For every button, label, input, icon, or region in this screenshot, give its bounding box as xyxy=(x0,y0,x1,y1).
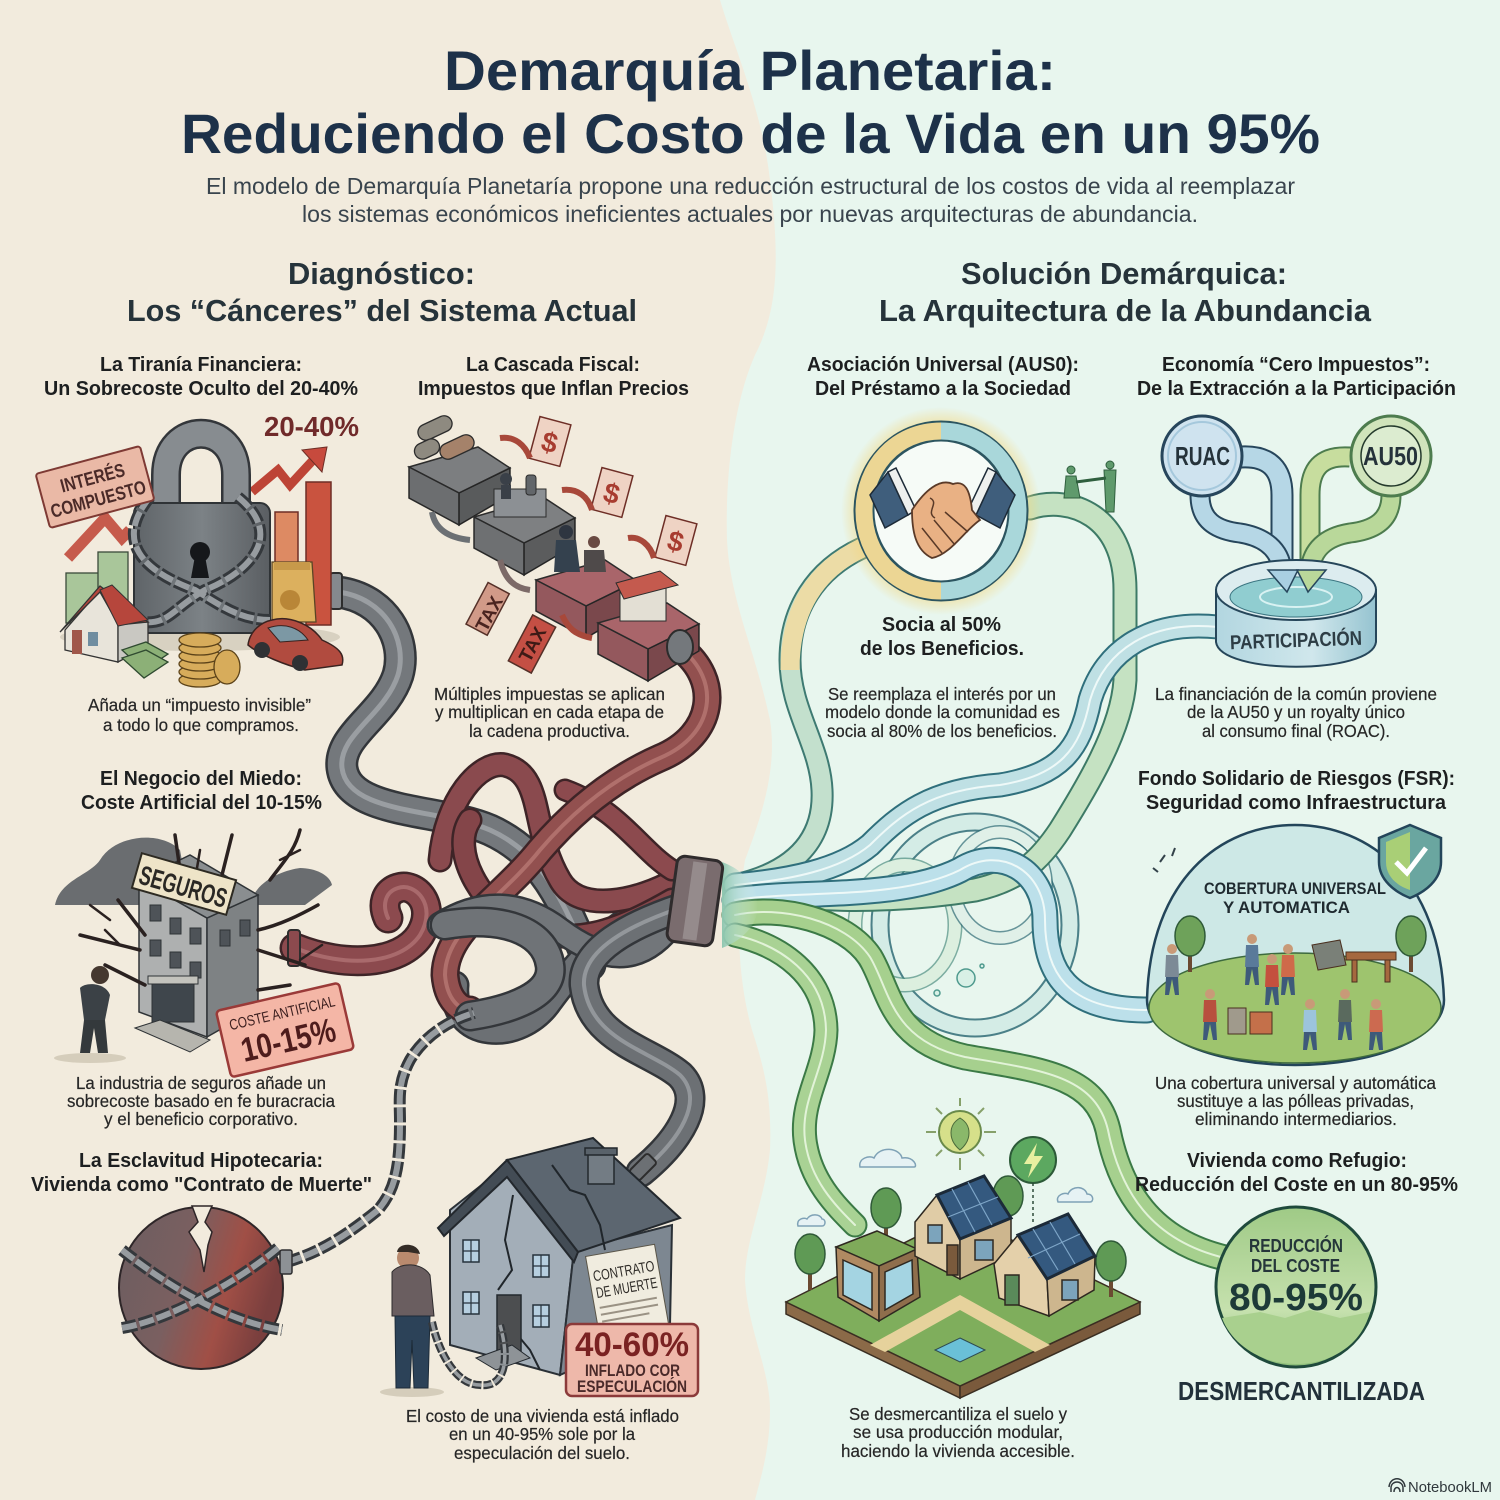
glow xyxy=(841,407,1041,615)
text: socia al 50%: de los Beneficios. xyxy=(860,638,1024,660)
label: cobertura: COBERTURA UNIVERSAL xyxy=(1204,879,1386,898)
subheading: fondo solidario: Fondo Solidario de Riesgos (FSR): xyxy=(1138,768,1455,790)
label: desmercantilizada: DESMERCANTILIZADA xyxy=(1178,1376,1425,1406)
icon: clouds xyxy=(798,1149,1093,1226)
subheading: tirania financiera: Un Sobrecoste Oculto del 20-40% xyxy=(44,378,358,400)
pipe: to reduction circle green xyxy=(735,912,1225,1258)
text: financiacion comun xyxy=(1155,684,1437,741)
circle: ruac: RUAC xyxy=(1175,441,1230,471)
icon: dollar tags: $ xyxy=(538,425,562,460)
pipe: gray financial xyxy=(338,592,590,965)
sign: seguros xyxy=(132,853,236,915)
text: industria de seguros: sobrecoste basado en fe buracracia xyxy=(67,1091,335,1111)
trees xyxy=(795,1176,1126,1297)
text: socia al 50% xyxy=(860,614,1024,660)
text: multiples impuestos xyxy=(434,684,665,741)
text: financiacion comun: La financiación de la común proviene xyxy=(1155,684,1437,704)
illustration: participation tank xyxy=(1162,416,1431,667)
contract paper: CONTRATO xyxy=(592,1258,656,1285)
label: interes compuesto xyxy=(36,446,154,528)
sign: seguros: SEGUROS xyxy=(136,860,231,914)
chains on ball xyxy=(122,1248,282,1330)
subheading: fondo solidario xyxy=(1138,768,1455,814)
icon: shield xyxy=(1379,825,1441,898)
badge: coste artificial: COSTE ANTIFICIAL xyxy=(228,993,337,1034)
icon: red car xyxy=(248,619,343,671)
text: reemplaza interes xyxy=(825,684,1060,741)
text: impuesto invisible: a todo lo que compramos. xyxy=(103,715,299,735)
trees xyxy=(1175,916,1426,972)
illustration: cracked house xyxy=(380,1138,698,1397)
pipe: maroon top loop xyxy=(440,765,675,901)
text: costo vivienda: especulación del suelo. xyxy=(454,1443,630,1463)
illustration: tax cascade xyxy=(409,413,699,681)
badge: 40-60%: INFLADO COR xyxy=(585,1361,680,1380)
ball connector xyxy=(280,1250,292,1274)
chain: man to house xyxy=(432,1322,505,1385)
subheading: esclavitud hipotecaria xyxy=(31,1150,372,1196)
pipe: maroon middle xyxy=(464,820,672,936)
ground xyxy=(1149,953,1441,1063)
text: reduccion: DEL COSTE xyxy=(1251,1256,1340,1276)
text: cobertura universal: eliminando intermediarios. xyxy=(1195,1109,1397,1129)
text: multiples impuestos: y multiplican en cada etapa de xyxy=(435,702,664,722)
cracks xyxy=(498,1165,605,1370)
icon: dollar tags: $ xyxy=(664,524,688,559)
icon: coffee bag xyxy=(272,562,316,622)
text: costo vivienda: en un 40-95% sole por la xyxy=(449,1424,635,1444)
people xyxy=(1165,934,1383,1050)
pipe: ruac right xyxy=(1240,457,1282,570)
contract paper: DE MUERTE xyxy=(595,1275,659,1302)
text: industria de seguros: La industria de seguros añade un xyxy=(76,1073,326,1093)
ring xyxy=(864,431,1018,591)
bars xyxy=(275,482,331,625)
crack xyxy=(189,1206,212,1272)
subtitle xyxy=(206,173,1295,227)
subheading: tirania financiera xyxy=(44,354,358,400)
icon: dollar tags: $ xyxy=(600,476,624,511)
subheading: vivienda refugio: Reducción del Coste en un 80-95% xyxy=(1135,1174,1458,1196)
circle: ruac xyxy=(1162,416,1242,496)
pipe: gray to house xyxy=(584,908,690,1172)
label: 20-40%: 20-40% xyxy=(264,411,359,442)
text: financiacion comun: al consumo final (ROAC). xyxy=(1202,721,1390,741)
badge: 40-60% xyxy=(566,1324,698,1396)
stroller and cart xyxy=(1228,1008,1272,1034)
text: multiples impuestos: Múltiples impuestas se aplican xyxy=(434,684,665,704)
pipe: ruac down xyxy=(1200,495,1282,570)
icon: sun leaf xyxy=(926,1098,996,1170)
pipe: gray to chain xyxy=(445,922,550,1016)
text: cobertura universal xyxy=(1155,1073,1436,1129)
pipe: from handshake, green xyxy=(735,504,1125,899)
text: financiacion comun: de la AU50 y un royalty único xyxy=(1187,702,1405,722)
text: impuesto invisible: Añada un “impuesto invisible” xyxy=(88,695,311,715)
heading: solucion: Solución Demárquica: xyxy=(961,256,1287,291)
box: store xyxy=(598,571,699,681)
pipe: to handshake xyxy=(735,548,862,885)
box: raw materials xyxy=(409,413,510,525)
pipe: to dome blue xyxy=(735,860,1147,1010)
box: factory xyxy=(474,473,575,575)
padlock xyxy=(60,434,340,651)
subheading: esclavitud hipotecaria: Vivienda como "Contrato de Muerte" xyxy=(31,1174,372,1196)
icon: dollar tags xyxy=(529,417,697,565)
label: interes compuesto: COMPUESTO xyxy=(48,477,149,523)
subheading: cascada fiscal xyxy=(418,354,689,400)
picnic table xyxy=(1312,940,1396,982)
text: industria de seguros xyxy=(67,1073,335,1129)
subheading: cascada fiscal: Impuestos que Inflan Precios xyxy=(418,378,689,400)
chain to pipe xyxy=(287,1013,474,1262)
heading: diagnostico: Los “Cánceres” del Sistema Actual xyxy=(127,293,637,328)
icon: sparkle lines xyxy=(1153,848,1175,872)
modular cube house xyxy=(836,1231,920,1321)
subheading: negocio del miedo xyxy=(81,768,322,814)
icon: banknotes xyxy=(122,642,168,678)
icon: tax tags: TAX xyxy=(515,623,551,666)
pipe: maroon insurance xyxy=(295,887,427,961)
title: Demarquía Planetaria: xyxy=(444,39,1056,102)
platform xyxy=(786,1215,1140,1398)
house two xyxy=(994,1214,1095,1316)
text: costo vivienda xyxy=(406,1406,679,1463)
icon: energy bolt xyxy=(1010,1137,1056,1225)
tank body xyxy=(1216,590,1376,667)
subheading: asociacion universal: Del Préstamo a la Sociedad xyxy=(815,378,1071,400)
text: socia al 50%: Socia al 50% xyxy=(882,614,1001,636)
icon: small house xyxy=(60,585,148,662)
icon: coins xyxy=(179,633,240,687)
text: cobertura universal: sustituye a las pólleas privadas, xyxy=(1177,1091,1414,1111)
figure: chained man xyxy=(380,1245,444,1397)
text: costo vivienda: El costo de una vivienda está inflado xyxy=(406,1406,679,1426)
icon: tax tags xyxy=(466,583,556,673)
contract paper xyxy=(586,1244,669,1337)
illustration: handshake circle xyxy=(841,407,1116,615)
heading: solucion xyxy=(879,256,1372,328)
label: cobertura xyxy=(1204,879,1386,917)
building xyxy=(139,855,258,1037)
pipe socket xyxy=(667,630,693,664)
circle: au50: AU50 xyxy=(1363,441,1418,471)
text: desmercantiliza: Se desmercantiliza el suelo y xyxy=(849,1404,1067,1424)
illustration: padlock, debt and goods xyxy=(36,411,359,687)
arrowheads xyxy=(1268,570,1326,592)
subheading: fondo solidario: Seguridad como Infraestructura xyxy=(1146,792,1447,814)
subheading: asociacion universal: Asociación Universal (AUS0): xyxy=(807,354,1079,376)
title: Reduciendo el Costo de la Vida en un 95% xyxy=(181,102,1320,165)
thorns xyxy=(80,830,322,990)
heading: diagnostico: Diagnóstico: xyxy=(288,256,475,291)
background: cream left side xyxy=(0,0,776,1500)
subheading: tirania financiera: La Tiranía Financiera: xyxy=(100,354,302,376)
pipe: au50 down xyxy=(1310,495,1391,570)
windows xyxy=(150,905,250,978)
sleeves xyxy=(870,468,1015,528)
finger lines xyxy=(922,498,968,553)
figures on pipe xyxy=(1064,461,1116,512)
illustration: reduction circle xyxy=(1216,1207,1376,1367)
pipe: participation blue xyxy=(735,626,1218,885)
pipe: gray middle xyxy=(440,907,675,955)
text: desmercantiliza xyxy=(841,1404,1075,1461)
text: reduccion: 80-95% xyxy=(1229,1277,1363,1319)
icon: tax tags: TAX xyxy=(472,593,508,635)
subtitle: El modelo de Demarquía Planetaría propone una reducción estructural de los costos de vida al reemplazar xyxy=(206,173,1295,199)
arrow: rising right xyxy=(252,447,327,492)
text: desmercantiliza: se usa producción modular, xyxy=(853,1422,1063,1442)
roof xyxy=(438,1138,680,1262)
pipe: maroon upper short xyxy=(565,790,672,870)
pipe: maroon fiscal xyxy=(445,648,707,1010)
text: reemplaza interes: socia al 80% de los beneficios. xyxy=(827,721,1057,741)
icon: water bubbles xyxy=(934,964,984,996)
badge: 40-60%: ESPECULACIÓN xyxy=(577,1377,687,1396)
badge: coste artificial xyxy=(216,983,354,1077)
entrance xyxy=(135,976,210,1052)
pipe: gray lower loop xyxy=(455,895,680,1030)
label: cobertura: Y AUTOMATICA xyxy=(1223,898,1350,917)
text: reduccion xyxy=(1229,1235,1363,1319)
inner hills xyxy=(1222,1310,1370,1364)
tangled pipes: cancers of the current system xyxy=(288,573,707,1181)
illustration: sustainable housing xyxy=(786,1098,1140,1398)
pipe sockets xyxy=(288,573,657,1181)
subheading: cero impuestos: De la Extracción a la Participación xyxy=(1137,378,1456,400)
circle: au50 xyxy=(1351,416,1431,496)
subtitle: los sistemas económicos ineficientes actuales por nuevas arquitecturas de abundancia. xyxy=(302,201,1198,227)
badge: coste artificial: 10-15% xyxy=(237,1011,339,1070)
arrow: rising left xyxy=(68,518,130,558)
subheading: negocio del miedo: Coste Artificial del 10-15% xyxy=(81,792,322,814)
pond xyxy=(935,1338,985,1362)
subheading: vivienda refugio xyxy=(1135,1150,1458,1196)
text: reemplaza interes: Se reemplaza el interés por un xyxy=(828,684,1056,704)
box: intermediaries xyxy=(536,525,637,638)
path cross xyxy=(870,1295,1050,1352)
tank water xyxy=(1216,560,1376,620)
label: interes compuesto: INTERÉS xyxy=(58,459,127,497)
subheading: esclavitud hipotecaria: La Esclavitud Hipotecaria: xyxy=(79,1150,323,1172)
heading: solucion: La Arquitectura de la Abundancia xyxy=(879,293,1372,328)
hands xyxy=(912,482,980,558)
text: reduccion: REDUCCIÓN xyxy=(1249,1235,1343,1256)
glass rings xyxy=(855,822,1070,1028)
chimney xyxy=(585,1148,617,1184)
illustration: wrecking ball and chain xyxy=(119,1013,474,1369)
collar joining the pipes xyxy=(666,855,758,948)
subheading: cero impuestos xyxy=(1137,354,1456,400)
logo: notebooklm: NotebookLM xyxy=(1408,1480,1492,1496)
text: impuesto invisible xyxy=(88,695,311,735)
illustration: glass dome community xyxy=(1147,825,1444,1065)
house walls xyxy=(450,1165,672,1375)
windows and door xyxy=(463,1240,549,1370)
icon: green boxes xyxy=(66,552,128,623)
pipe: to housing green xyxy=(735,935,855,1225)
chain around lock xyxy=(134,497,270,622)
text: multiples impuestos: la cadena productiva. xyxy=(469,721,630,741)
subheading: cascada fiscal: La Cascada Fiscal: xyxy=(466,354,640,376)
house one xyxy=(915,1176,1011,1279)
subheading: asociacion universal xyxy=(807,354,1079,400)
text: reemplaza interes: modelo donde la comunidad es xyxy=(825,702,1060,722)
label: participacion: PARTICIPACIÓN xyxy=(1230,626,1362,654)
illustration: insurance building xyxy=(54,830,354,1077)
text: industria de seguros: y el beneficio corporativo. xyxy=(104,1109,298,1129)
subheading: vivienda refugio: Vivienda como Refugio: xyxy=(1187,1150,1407,1172)
subheading: negocio del miedo: El Negocio del Miedo: xyxy=(100,768,302,790)
figure: worried man xyxy=(54,966,126,1063)
pipe: au50 left xyxy=(1310,457,1350,570)
subheading: cero impuestos: Economía “Cero Impuestos”: xyxy=(1162,354,1430,376)
heading: diagnostico xyxy=(127,256,637,328)
clean pipes: architecture of abundance xyxy=(735,504,1225,1258)
arrows: cascade red xyxy=(432,438,654,638)
circle xyxy=(1216,1207,1376,1367)
title xyxy=(181,39,1320,165)
text: cobertura universal: Una cobertura universal y automática xyxy=(1155,1073,1436,1093)
text: desmercantiliza: haciendo la vivienda accesible. xyxy=(841,1441,1075,1461)
dome xyxy=(1147,825,1444,1065)
storm cloud xyxy=(55,838,332,905)
ball xyxy=(119,1207,283,1369)
badge: 40-60%: 40-60% xyxy=(575,1326,689,1364)
